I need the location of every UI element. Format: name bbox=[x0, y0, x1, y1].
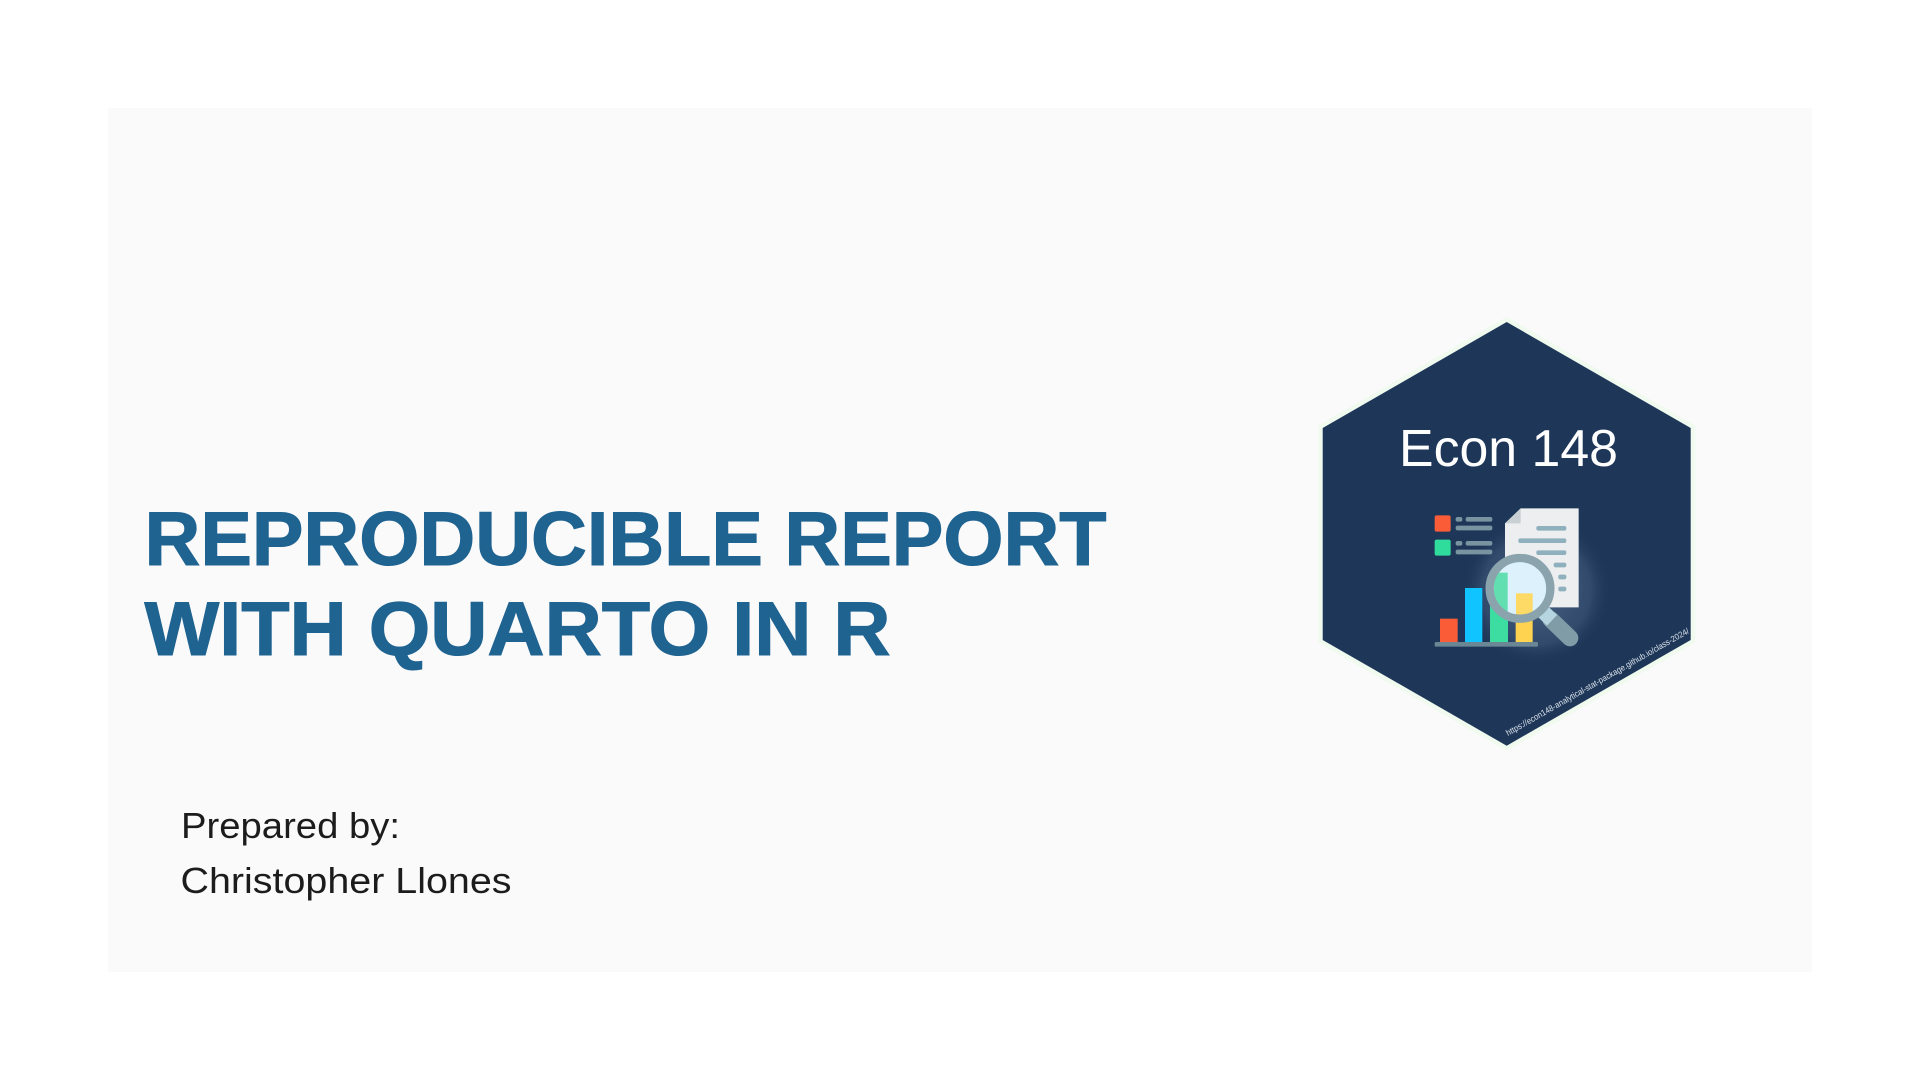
icon: magnifying glass bbox=[1490, 558, 1570, 638]
icon: document bbox=[1505, 508, 1579, 607]
badge url: https://econ148-analytical-stat-package.github.io/class-2024/ bbox=[1504, 626, 1691, 738]
icon: legend list bbox=[1435, 515, 1492, 556]
title: WITH QUARTO IN R bbox=[144, 587, 890, 672]
icon: report with bar chart and magnifying glass bbox=[1434, 508, 1598, 652]
author credit bbox=[180, 805, 512, 901]
panel: background bbox=[108, 108, 1812, 972]
badge heading: Econ 148 bbox=[1399, 420, 1618, 478]
author credit: Christopher Llones bbox=[180, 860, 512, 901]
title: REPRODUCIBLE REPORT bbox=[144, 497, 1106, 582]
author credit: Prepared by: bbox=[181, 805, 400, 846]
hexagon badge bbox=[1323, 322, 1691, 746]
bar chart bbox=[1435, 573, 1538, 647]
title bbox=[144, 497, 1106, 672]
